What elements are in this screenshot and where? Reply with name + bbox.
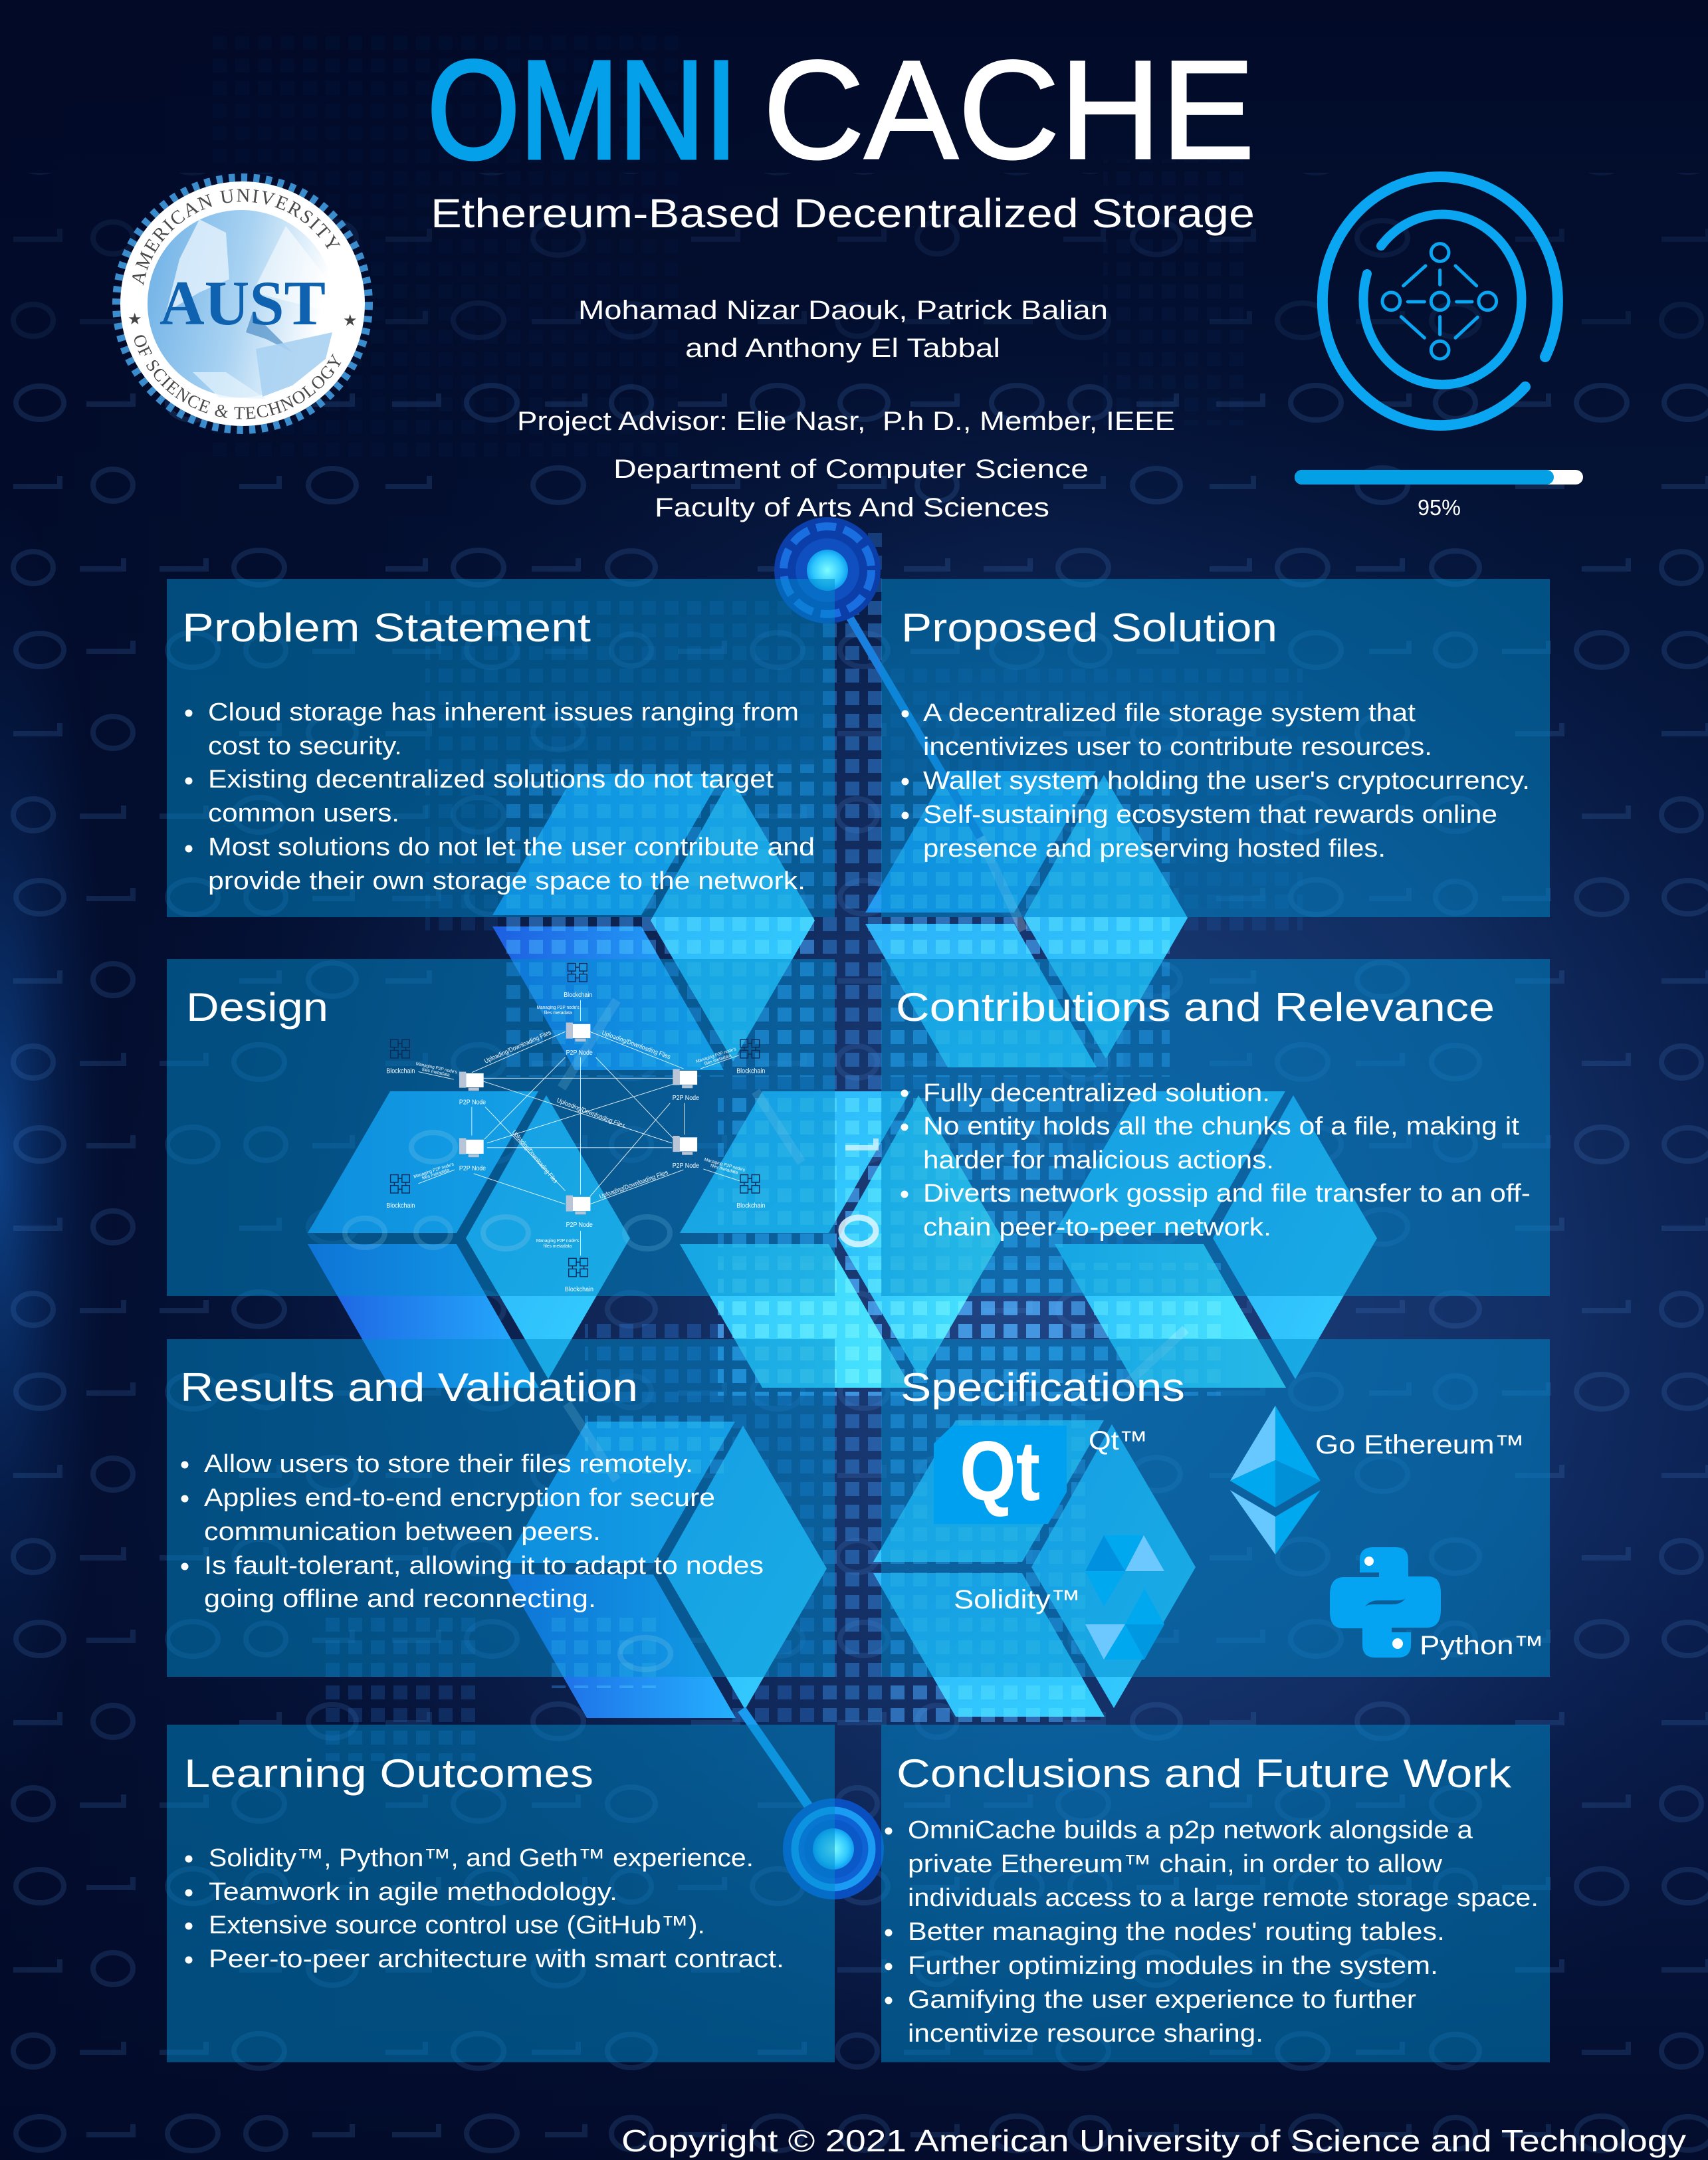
bullet list: solution: A decentralized file storage system that [923, 699, 1416, 727]
network diagram: p2p nodes and blockchains: Blockchain [736, 1067, 765, 1075]
panel: conclusions and future work [881, 1725, 1550, 2062]
bullet list: outcomes: Solidity™, Python™, and Geth™ experience. [209, 1844, 754, 1872]
icon: network in concentric rings [1323, 177, 1558, 425]
background dot grid, dark layer [213, 27, 1303, 1761]
department and faculty: Faculty of Arts And Sciences [655, 493, 1049, 522]
icon: Solidity logo [1085, 1535, 1164, 1660]
bullet list: outcomes [185, 1844, 784, 1973]
heading: proposed solution: Proposed Solution [901, 605, 1277, 650]
department and faculty [613, 455, 1089, 522]
bullet list: conclusions: Better managing the nodes' routing tables. [908, 1918, 1445, 1946]
bullet list: conclusions: OmniCache builds a p2p network alongside a [908, 1816, 1473, 1844]
logo: AUST university seal: ★ [128, 310, 142, 328]
bullet list: results [181, 1450, 764, 1613]
network diagram: p2p nodes and blockchains: files metadata [421, 1067, 450, 1078]
logo: AUST university seal: ★ [343, 312, 358, 330]
network diagram: p2p nodes and blockchains: files metadata [421, 1168, 450, 1181]
network diagram: p2p nodes and blockchains: Managing P2P node's [704, 1157, 746, 1173]
network diagram: p2p nodes and blockchains: Managing P2P node's [415, 1061, 458, 1075]
icon: Qt logo [934, 1424, 1067, 1524]
label: Go Ethereum: Go Ethereum™ [1315, 1430, 1525, 1459]
subtitle: Ethereum-Based Decentralized Storage [431, 191, 1255, 236]
network diagram: p2p nodes and blockchains: P2P Node [459, 1165, 486, 1172]
bullet list: conclusions: incentivize resource sharing. [908, 2020, 1263, 2048]
network diagram: p2p nodes and blockchains: P2P Node [673, 1095, 699, 1102]
bullet list: solution: Wallet system holding the user's cryptocurrency. [923, 767, 1530, 795]
bullet list: problems: Existing decentralized solutions do not target [208, 766, 774, 794]
bullet list: problems: cost to security. [208, 732, 402, 760]
label: Qt: Qt™ [1089, 1426, 1148, 1456]
bullet list: conclusions [885, 1816, 1539, 2048]
label: Solidity: Solidity™ [954, 1585, 1081, 1614]
logo: OmniCache wordmark [427, 31, 1255, 188]
bullet list: contributions: Diverts network gossip and file transfer to an off- [923, 1180, 1531, 1208]
network diagram: p2p nodes and blockchains: P2P Node [673, 1162, 699, 1170]
network diagram: p2p nodes and blockchains: Uploading/Downloading Files [510, 1129, 559, 1185]
bullet list: solution: incentivizes user to contribute resources. [923, 733, 1432, 761]
bullet list: contributions: chain peer-to-peer network. [923, 1214, 1271, 1242]
authors: and Anthony El Tabbal [685, 334, 1000, 363]
network diagram: p2p nodes and blockchains: files metadata [544, 1011, 572, 1016]
connector line: top node [847, 612, 980, 837]
bullet list: problems: common users. [208, 800, 399, 827]
advisor: Project Advisor: Elie Nasr, P.h D., Member, IEEE [517, 407, 1175, 436]
network diagram: p2p nodes and blockchains: files metadata [704, 1053, 732, 1067]
network diagram: p2p nodes and blockchains: Managing P2P node's [695, 1047, 737, 1064]
panel: proposed solution [881, 579, 1550, 917]
bullet list: results: Is fault-tolerant, allowing it to adapt to nodes [204, 1552, 764, 1580]
bullet list: results: going offline and reconnecting. [204, 1585, 596, 1613]
heading: design: Design [186, 985, 328, 1029]
label: Python: Python™ [1420, 1631, 1544, 1660]
department and faculty: Department of Computer Science [613, 455, 1089, 484]
panel: learning outcomes [167, 1725, 835, 2062]
bullet list: solution: Self-sustaining ecosystem that rewards online [923, 801, 1497, 829]
bullet list: outcomes: Peer-to-peer architecture with smart contract. [209, 1945, 784, 1973]
bullet list: problems: Cloud storage has inherent issues ranging from [208, 699, 799, 726]
logo: AUST university seal [112, 173, 373, 434]
progress value: 95% [1418, 495, 1461, 520]
panel: design [167, 959, 835, 1296]
bullet list: conclusions: private Ethereum™ chain, in order to allow [908, 1850, 1443, 1878]
network diagram: p2p nodes and blockchains: Uploading/Downloading Files [601, 1029, 671, 1061]
network diagram: p2p nodes and blockchains: Managing P2P node's [413, 1162, 455, 1180]
network diagram: p2p nodes and blockchains: P2P Node [566, 1222, 593, 1229]
icon: Qt logo: Qt [960, 1424, 1040, 1518]
bullet list: contributions: No entity holds all the chunks of a file, making it [923, 1113, 1519, 1140]
network diagram: p2p nodes and blockchains: files metadata [710, 1164, 738, 1175]
panel: specifications [881, 1339, 1550, 1677]
network diagram: p2p nodes and blockchains: files metadata [544, 1244, 572, 1249]
bullet list: outcomes: Extensive source control use (GitHub™). [209, 1911, 705, 1939]
heading: specifications: Specifications [901, 1365, 1185, 1410]
hexagon cube clusters [308, 771, 1377, 1718]
network diagram: p2p nodes and blockchains: Blockchain [386, 1202, 415, 1210]
network diagram: p2p nodes and blockchains: P2P Node [459, 1099, 486, 1106]
icon: bottom glowing node [783, 1798, 884, 1899]
bullet list: problems: provide their own storage space to the network. [208, 867, 805, 895]
translucent accent strokes [562, 837, 1186, 1480]
bullet list: outcomes: Teamwork in agile methodology. [209, 1878, 617, 1906]
panel: contributions and relevance [881, 959, 1550, 1296]
logo: AUST university seal: AUST [160, 268, 326, 338]
network diagram: p2p nodes and blockchains: Blockchain [386, 1067, 415, 1075]
binary digits glowing over hexagons [345, 1133, 876, 1670]
heading: contributions and relevance: Contributions and Relevance [896, 985, 1495, 1029]
network diagram: p2p nodes and blockchains: Blockchain [736, 1202, 765, 1210]
authors: Mohamad Nizar Daouk, Patrick Balian [578, 296, 1108, 325]
network diagram: p2p nodes and blockchains: Uploading/Downloading Files [556, 1097, 626, 1130]
panel: results and validation [167, 1339, 835, 1677]
icon: top glowing node [774, 517, 881, 623]
bullet list: contributions [901, 1079, 1531, 1242]
bullet list: problems: Most solutions do not let the user contribute and [208, 833, 815, 861]
connector line: bottom node [742, 1709, 813, 1813]
bullet list: results: communication between peers. [204, 1518, 601, 1546]
logo: OmniCache wordmark: OMNI [427, 31, 738, 188]
dot grid, glowing layer over hexagons [505, 598, 1223, 1728]
logo: AUST university seal: AMERICAN UNIVERSITY [132, 189, 340, 286]
copyright footer: Copyright © 2021 American University of Science and Technology [621, 2123, 1686, 2158]
progress bar [1295, 470, 1583, 485]
bullet list: results: Allow users to store their files remotely. [204, 1450, 693, 1478]
network diagram: p2p nodes and blockchains: Managing P2P node's [536, 1006, 580, 1010]
icon: Ethereum diamond [1230, 1406, 1321, 1555]
network diagram: p2p nodes and blockchains [386, 964, 765, 1293]
heading: learning outcomes: Learning Outcomes [184, 1751, 593, 1796]
icon: Python logo [1330, 1547, 1441, 1658]
bullet list: solution [901, 699, 1530, 863]
logo: AUST university seal: OF SCIENCE & TECHNOLOGY [134, 335, 342, 419]
bullet list: conclusions: individuals access to a large remote storage space. [908, 1884, 1539, 1912]
bullet list: contributions: harder for malicious actions. [923, 1146, 1274, 1174]
network diagram: p2p nodes and blockchains: Managing P2P node's [536, 1239, 580, 1243]
bullet list: contributions: Fully decentralized solution. [923, 1079, 1270, 1107]
heading: problem statement: Problem Statement [182, 605, 591, 650]
authors [578, 296, 1108, 363]
logo: OmniCache wordmark: CACHE [763, 31, 1255, 188]
network diagram: p2p nodes and blockchains: Uploading/Downloading Files [483, 1029, 552, 1065]
network diagram: p2p nodes and blockchains: Blockchain [565, 1286, 593, 1293]
network diagram: p2p nodes and blockchains: Blockchain [564, 992, 592, 999]
heading: results and validation: Results and Validation [180, 1365, 638, 1410]
bullet list: solution: presence and preserving hosted files. [923, 835, 1386, 863]
heading: conclusions and future work: Conclusions and Future Work [897, 1751, 1512, 1796]
bullet list: conclusions: Further optimizing modules in the system. [908, 1952, 1438, 1980]
bullet list: conclusions: Gamifying the user experience to further [908, 1986, 1416, 2014]
bullet list: results: Applies end-to-end encryption for secure [204, 1484, 715, 1512]
network diagram: p2p nodes and blockchains: Uploading/Downloading Files [599, 1169, 669, 1201]
bullet list: problems [185, 699, 815, 895]
panel: problem statement [167, 579, 835, 917]
network diagram: p2p nodes and blockchains: P2P Node [566, 1049, 593, 1057]
